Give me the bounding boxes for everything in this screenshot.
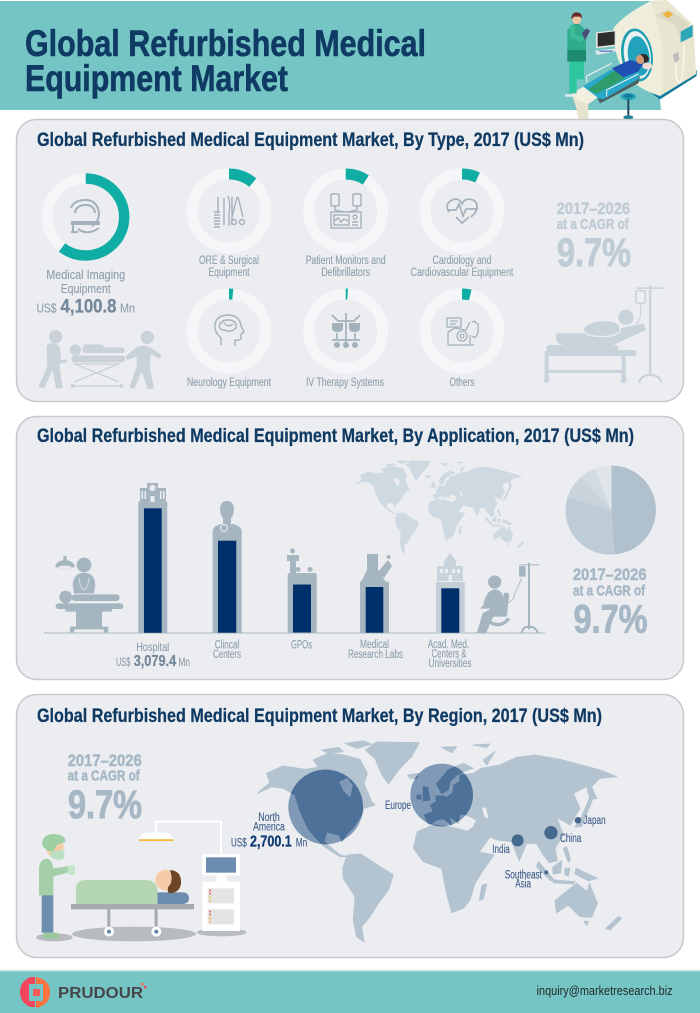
- illustration: surgeon with patient and monitor: [36, 822, 247, 941]
- label: medical imaging equipment: Equipment: [61, 281, 111, 296]
- icon: stretcher with two carers: [38, 330, 162, 389]
- world map background: [356, 460, 524, 553]
- label: medical research labs: Research Labs: [348, 649, 403, 661]
- label: patient monitors: Patient Monitors and: [306, 255, 386, 267]
- callout: cagr: 9.7%: [574, 598, 648, 642]
- panel: by application: [16, 416, 684, 680]
- label: north america: US$: [231, 838, 247, 850]
- ring: patient monitors: [309, 174, 383, 248]
- label: medical imaging equipment: US$: [36, 300, 57, 316]
- label: north america: America: [253, 822, 285, 834]
- label: hospital: Hospital: [136, 640, 169, 654]
- illustration: MRI scanner with doctor and patient: [565, 0, 697, 121]
- label: clinical centers: [213, 640, 241, 661]
- ring: neurology: [192, 294, 266, 368]
- label: ore & surgical: Equipment: [208, 267, 250, 279]
- logo: prudour: [20, 977, 146, 1008]
- label: gpos: GPOs: [291, 640, 312, 652]
- label: southeast asia: Southeast: [505, 870, 543, 882]
- label: academic medical centers: Centers &: [432, 648, 467, 660]
- label: medical research labs: Medical: [360, 639, 389, 651]
- bar: gpos: [287, 548, 317, 633]
- ring: medical imaging equipment: [47, 178, 124, 256]
- callout: cagr: 2017–2026: [573, 565, 646, 584]
- label: academic medical centers: Universities: [428, 658, 472, 670]
- label: japan: Japan: [583, 815, 606, 827]
- panel: by region: [16, 694, 684, 958]
- label: ore & surgical: ORE & Surgical: [199, 255, 259, 267]
- ring: others: [425, 294, 499, 368]
- axis line: [44, 632, 545, 634]
- bar: academic medical centers: [436, 553, 465, 633]
- callout: cagr: [573, 565, 648, 642]
- label: medical imaging equipment: Mn: [120, 300, 135, 316]
- label: iv therapy: IV Therapy Systems: [306, 377, 384, 389]
- ring: ore & surgical: [192, 174, 266, 248]
- footer band: [0, 970, 700, 1013]
- label: southeast asia: Asia: [515, 879, 531, 891]
- label: hospital: [116, 640, 190, 670]
- label: others: Others: [450, 377, 475, 389]
- callout: cagr: 9.7%: [557, 231, 631, 275]
- ring: cardiology: [425, 174, 499, 248]
- label: cardiology: Cardiovascular Equipment: [411, 267, 514, 279]
- logo: prudour: PRUDOUR: [58, 985, 143, 1002]
- label: north america: 2,700.1: [250, 834, 292, 851]
- label: hospital: 3,079.4: [134, 653, 176, 670]
- pie chart: [566, 465, 656, 555]
- label: neurology: Neurology Equipment: [187, 377, 272, 389]
- label: academic medical centers: Acad. Med.: [428, 639, 469, 651]
- label: medical research labs: [348, 639, 403, 661]
- label: cardiology: [411, 255, 514, 279]
- ring: iv therapy: [309, 294, 383, 368]
- bar: clinical centers: [213, 501, 242, 633]
- title: Equipment Market: [25, 58, 288, 99]
- icon: surgeon at operating table: [55, 556, 123, 633]
- label: patient monitors: Defibrillators: [321, 267, 370, 279]
- panel: by type: [16, 120, 684, 402]
- bar: medical research labs: [360, 554, 392, 633]
- label: india: India: [492, 844, 510, 856]
- label: patient monitors: [306, 255, 386, 279]
- callout: cagr: 2017–2026: [68, 751, 142, 770]
- label: medical imaging equipment: Medical Imaging: [46, 267, 125, 282]
- label: china: China: [560, 833, 582, 845]
- label: clinical centers: Centers: [213, 649, 241, 661]
- label: north america: [231, 812, 307, 851]
- header band: [0, 1, 661, 110]
- contact email: inquiry@marketresearch.biz: [537, 983, 673, 998]
- heading: by region: Global Refurbished Medical Equipment Market, By Region, 2017 (US$ Mn): [37, 706, 602, 727]
- label: hospital: Mn: [178, 657, 190, 669]
- label: europe: Europe: [385, 800, 411, 812]
- label: medical imaging equipment: [36, 267, 135, 318]
- callout: cagr: 9.7%: [68, 783, 142, 827]
- label: north america: North: [258, 812, 280, 824]
- callout: cagr: [557, 199, 631, 275]
- label: medical imaging equipment: 4,100.8: [60, 296, 116, 318]
- label: ore & surgical: [199, 255, 259, 279]
- title: [25, 23, 426, 99]
- callout: cagr: 2017–2026: [557, 199, 630, 218]
- icon: patient in bed with iv: [544, 285, 663, 383]
- label: north america: Mn: [296, 838, 307, 850]
- label: cardiology: Cardiology and: [432, 255, 492, 267]
- callout: cagr: at a CAGR of: [68, 768, 140, 785]
- label: southeast asia: [505, 870, 543, 891]
- callout: cagr: [68, 751, 142, 827]
- label: hospital: US$: [116, 657, 131, 669]
- world map with market bubbles: [257, 741, 622, 942]
- callout: cagr: at a CAGR of: [557, 216, 629, 233]
- icon: patient in wheelchair with iv: [477, 563, 539, 633]
- title: Global Refurbished Medical: [25, 23, 426, 64]
- label: clinical centers: Clincal: [215, 640, 239, 652]
- callout: cagr: at a CAGR of: [573, 582, 646, 600]
- label: academic medical centers: [428, 639, 472, 670]
- bar: hospital: [138, 483, 167, 633]
- heading: by type: Global Refurbished Medical Equipment Market, By Type, 2017 (US$ Mn): [37, 130, 584, 151]
